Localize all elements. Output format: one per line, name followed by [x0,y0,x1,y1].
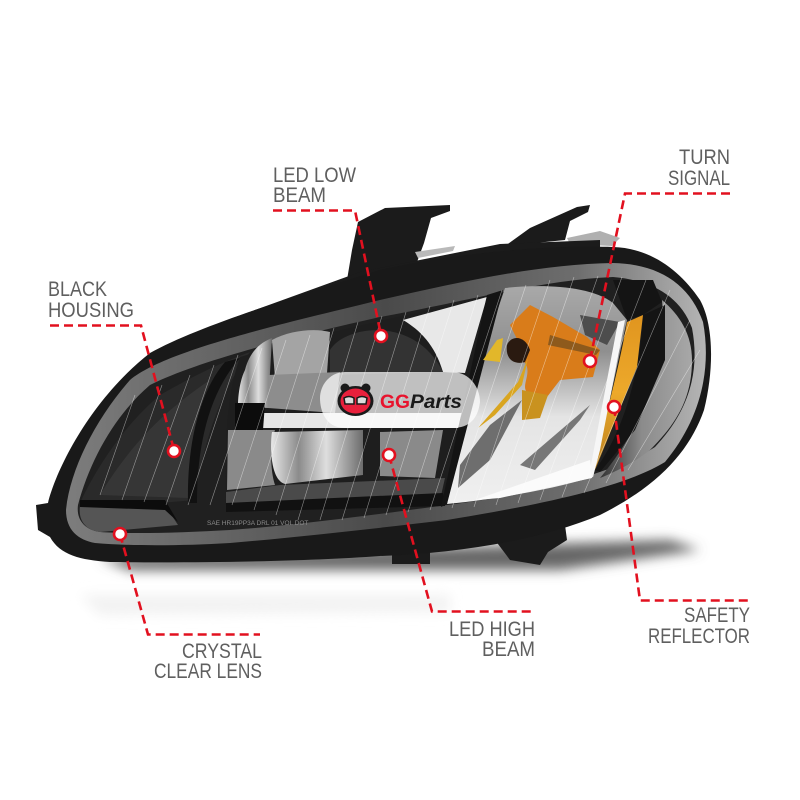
leader line [614,407,750,600]
label: CRYSTAL [182,640,262,663]
marker dot [168,445,180,457]
marker dot [608,401,620,413]
marker dot [383,449,395,461]
callout: black housing [48,278,180,457]
label [273,164,356,207]
chrome turn signal section [441,286,627,507]
label: HOUSING [48,299,134,322]
label: REFLECTOR [648,625,750,648]
label: TURN [679,146,730,169]
callout: LED low beam [273,164,387,342]
lens streak lines [100,276,700,520]
part marking: SAE HR19PP3A DRL 01 VOL DOT [207,520,308,527]
label: SAFETY [684,604,750,627]
label [154,640,262,683]
label [449,618,535,661]
leader line [389,455,535,612]
label: BEAM [482,638,535,661]
leader line [273,210,381,335]
callout: crystal clear lens [114,528,262,683]
callout: LED high beam [383,449,535,661]
logo watermark [320,372,480,428]
label: LED LOW [273,164,356,187]
callout: turn signal [584,146,730,367]
lens interior [78,277,695,533]
marker dot [114,528,126,540]
marker dot [584,355,596,367]
label: LED HIGH [449,618,535,641]
marker dot [375,330,387,342]
safety reflector [590,280,665,477]
black housing section [80,352,250,532]
logo mascot [338,384,374,416]
right side lamp section [600,300,692,478]
label: BEAM [273,184,326,207]
outer black housing [36,247,711,562]
low beam chrome section [226,295,490,512]
headlight [36,205,711,565]
logo panel [320,372,480,428]
leader line [50,326,174,450]
floor shadow [80,540,700,615]
label [648,604,750,648]
logo watermark: Parts [410,392,462,413]
label: BLACK [48,278,107,301]
label [48,278,134,322]
label: SIGNAL [668,167,730,190]
leader line [120,534,260,634]
logo wordmark: GG [380,392,410,413]
callout: safety reflector [608,401,750,648]
label: CLEAR LENS [154,660,262,683]
label [668,146,730,190]
mounting brackets [230,205,620,565]
lens rim [66,263,706,545]
leader line [590,194,730,360]
